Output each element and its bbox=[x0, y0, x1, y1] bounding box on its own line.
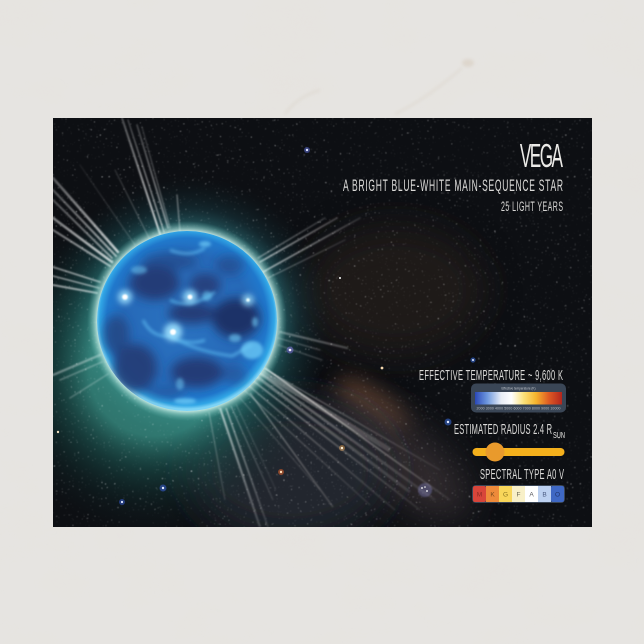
panel: space card bbox=[53, 118, 592, 527]
spectral type scale: G bbox=[503, 492, 508, 498]
title: VEGA: VEGA bbox=[520, 137, 563, 175]
radius label: SUN bbox=[553, 431, 565, 440]
spectral type scale: K bbox=[490, 492, 495, 498]
temperature scale widget bbox=[471, 384, 566, 412]
star body bbox=[97, 231, 277, 411]
deep space background bbox=[53, 118, 592, 527]
light rays: lower right beam bbox=[240, 368, 450, 510]
spectral type scale: A bbox=[529, 492, 534, 498]
distance: 25 LIGHT YEARS bbox=[501, 200, 563, 215]
star field bbox=[53, 118, 592, 527]
subtitle: A BRIGHT BLUE-WHITE MAIN-SEQUENCE STAR bbox=[343, 176, 563, 195]
spectral type scale bbox=[472, 485, 565, 503]
light rays: right bbox=[258, 218, 360, 360]
teal stellar glow bbox=[53, 192, 316, 508]
star surface plasma bbox=[103, 241, 263, 404]
coloured bright stars bbox=[57, 147, 476, 505]
radius slider bbox=[472, 442, 564, 462]
spectral type scale: O bbox=[555, 492, 560, 498]
spectral type scale: M bbox=[477, 492, 482, 498]
star halo bbox=[87, 221, 287, 421]
spectral type scale: F bbox=[517, 492, 521, 498]
light rays: downward bbox=[209, 404, 276, 527]
star bright flares bbox=[118, 290, 254, 341]
spectral type label: SPECTRAL TYPE A0 V bbox=[480, 465, 564, 483]
star: Vega sphere bbox=[87, 221, 287, 421]
spectral type scale: B bbox=[542, 492, 547, 498]
light rays: upper left bbox=[53, 118, 180, 398]
radius label: ESTIMATED RADIUS 2.4 R bbox=[454, 420, 552, 438]
radius label bbox=[454, 424, 565, 438]
milky way nebula bbox=[190, 225, 488, 540]
temperature scale widget: 2000 3000 4000 5000 6000 7000 8000 9000 10000 bbox=[476, 406, 561, 410]
temperature label: EFFECTIVE TEMPERATURE ~ 9,600 K bbox=[419, 366, 563, 384]
temperature scale widget: Effective temperature (K) bbox=[502, 386, 536, 390]
